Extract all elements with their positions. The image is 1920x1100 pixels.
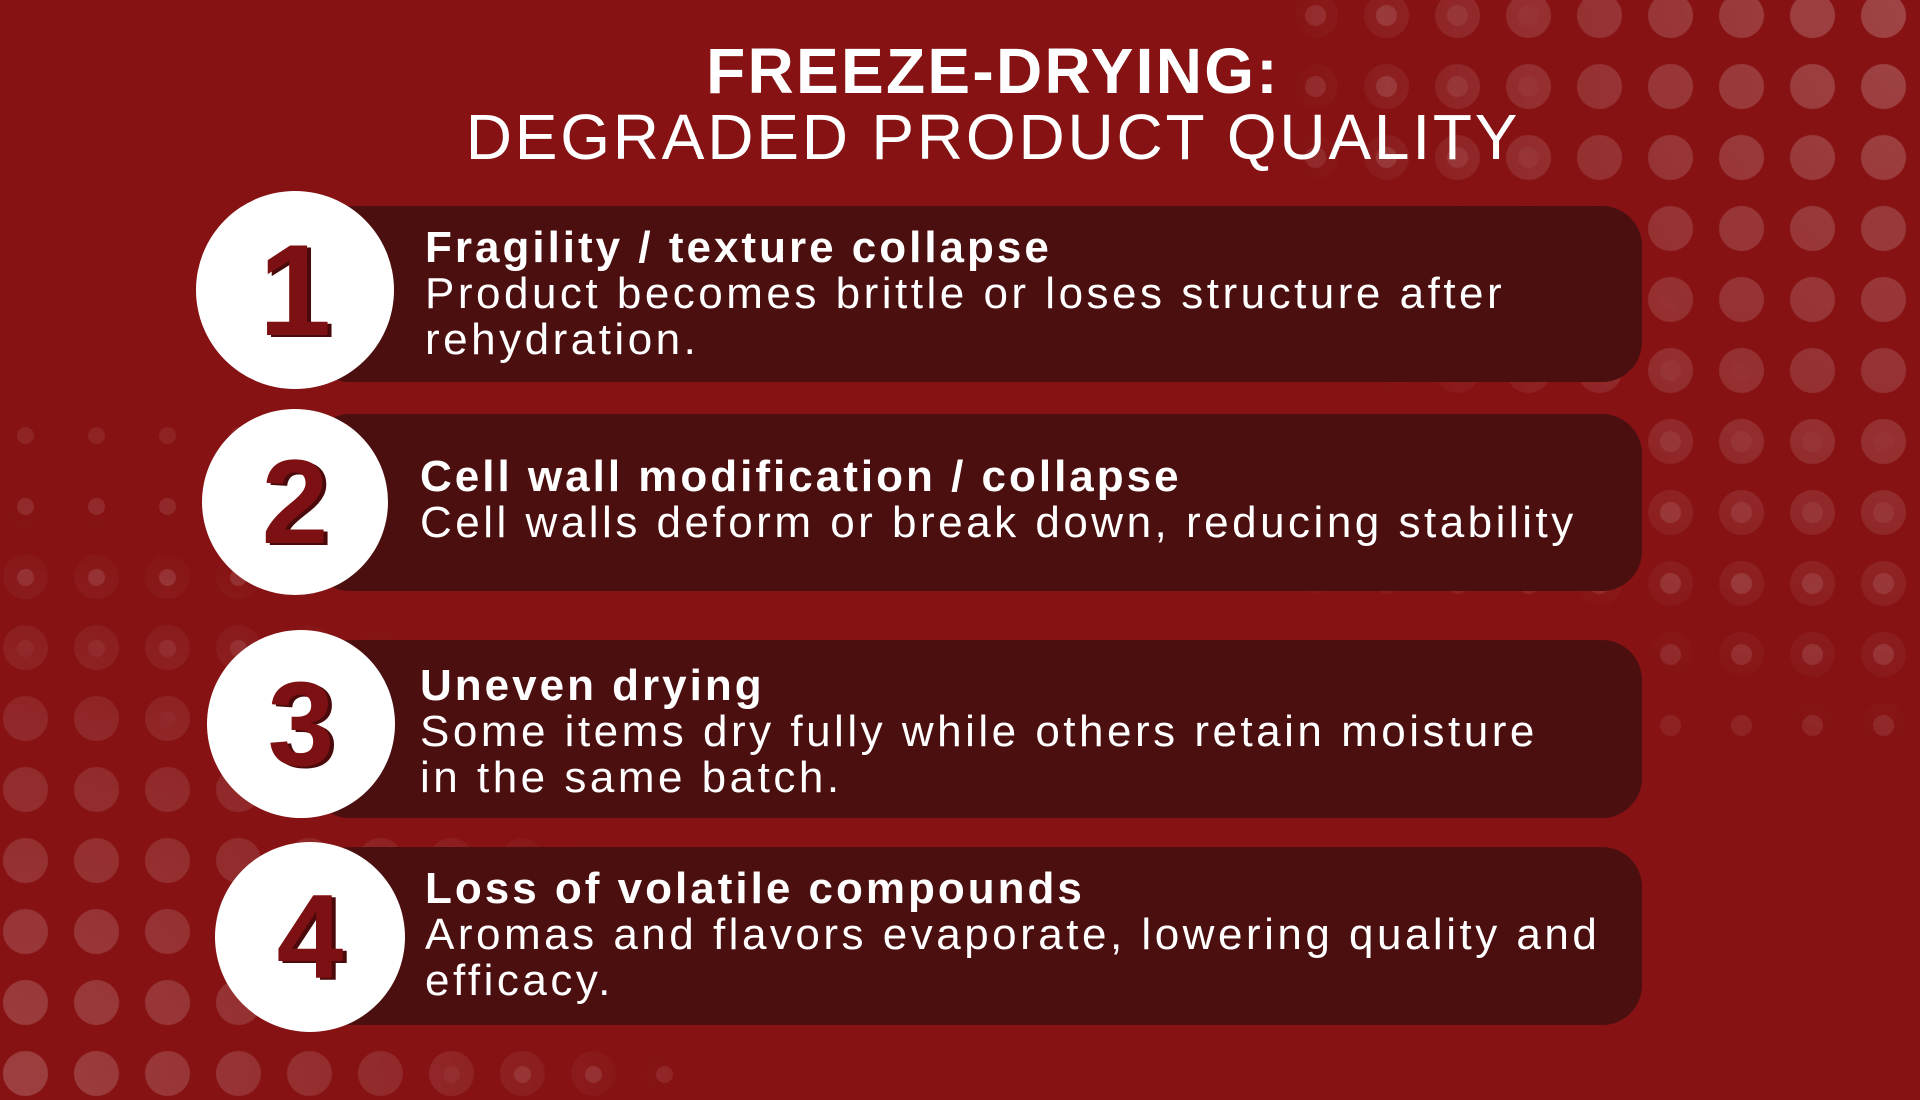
text: item 4: [425, 864, 1600, 1005]
title: FREEZE-DRYING:: [706, 35, 1280, 107]
panel: item 3: [310, 640, 1642, 818]
icon: number 3: [207, 630, 395, 818]
text: item 4: Loss of volatile compounds: [425, 864, 1085, 913]
icon: number 3: 3: [268, 657, 334, 791]
icon: number 2: [202, 409, 388, 595]
text: item 2: Cell wall modification / collapse: [420, 452, 1182, 501]
text: item 1: Fragility / texture collapse: [425, 223, 1052, 272]
text: item 4: Aromas and flavors evaporate, lowering quality and: [425, 910, 1600, 959]
icon: number 2: 2: [262, 435, 328, 569]
text: item 1: rehydration.: [425, 315, 699, 364]
title: DEGRADED PRODUCT QUALITY: [466, 101, 1520, 173]
text: item 3: Uneven drying: [420, 661, 765, 710]
title: [466, 35, 1520, 173]
text: item 1: Product becomes brittle or loses structure after: [425, 269, 1505, 318]
text: item 3: Some items dry fully while others retain moisture: [420, 707, 1538, 756]
icon: number 1: 1: [259, 217, 331, 363]
text: item 2: Cell walls deform or break down, reducing stability: [420, 498, 1577, 547]
text: item 4: efficacy.: [425, 956, 614, 1005]
text: item 1: [425, 223, 1505, 364]
icon: number 1: [196, 191, 394, 389]
panel: item 1: [310, 206, 1642, 382]
panel: item 2: [310, 414, 1642, 591]
text: item 3: [420, 661, 1538, 802]
icon: number 4: [215, 842, 405, 1032]
text: item 2: [420, 452, 1577, 547]
panel: item 4: [310, 847, 1642, 1025]
text: item 3: in the same batch.: [420, 753, 843, 802]
icon: number 4: 4: [277, 870, 343, 1004]
